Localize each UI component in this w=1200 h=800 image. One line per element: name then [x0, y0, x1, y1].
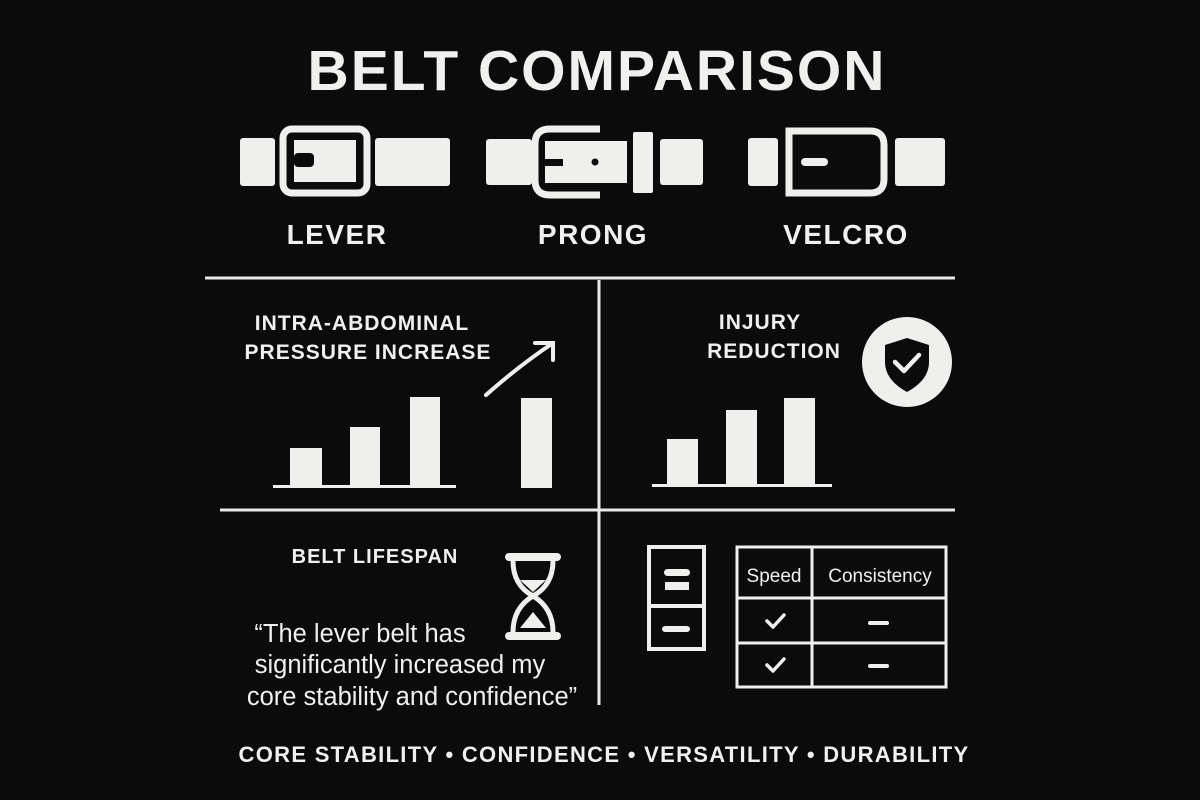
icon: lever belt [240, 129, 450, 193]
icon: velcro belt [748, 131, 945, 193]
quote: core stability and confidence” [247, 683, 577, 711]
heading: injury: INJURY [719, 311, 801, 334]
table: speed consistency: Speed [747, 566, 801, 587]
heading: pressure: PRESSURE INCREASE [245, 341, 491, 364]
heading: lifespan: BELT LIFESPAN [292, 546, 458, 568]
bar chart: injury [652, 398, 832, 487]
label: prong: PRONG [538, 219, 648, 250]
icon: hourglass [505, 553, 561, 640]
table: speed consistency [737, 547, 946, 687]
panel: injury reduction [652, 311, 952, 487]
table: speed consistency: Consistency [828, 566, 932, 587]
heading: injury: REDUCTION [707, 340, 841, 363]
panel: intra-abdominal pressure [245, 312, 553, 488]
heading: pressure: INTRA-ABDOMINAL [255, 312, 469, 335]
quote: “The lever belt has [254, 620, 466, 648]
icon: prong belt [486, 129, 703, 195]
panel: belt lifespan [247, 546, 577, 711]
footer: CORE STABILITY • CONFIDENCE • VERSATILITY • DURABILITY [239, 742, 969, 767]
bar chart: pressure [273, 397, 552, 488]
label: lever: LEVER [287, 219, 387, 250]
panel: cabinet and table [649, 547, 946, 687]
icon: shield [862, 317, 952, 407]
quote: significantly increased my [255, 651, 546, 679]
title: BELT COMPARISON [308, 39, 886, 103]
arrow: increase [486, 343, 553, 395]
label: velcro: VELCRO [783, 219, 909, 250]
icon: cabinet [649, 547, 704, 649]
